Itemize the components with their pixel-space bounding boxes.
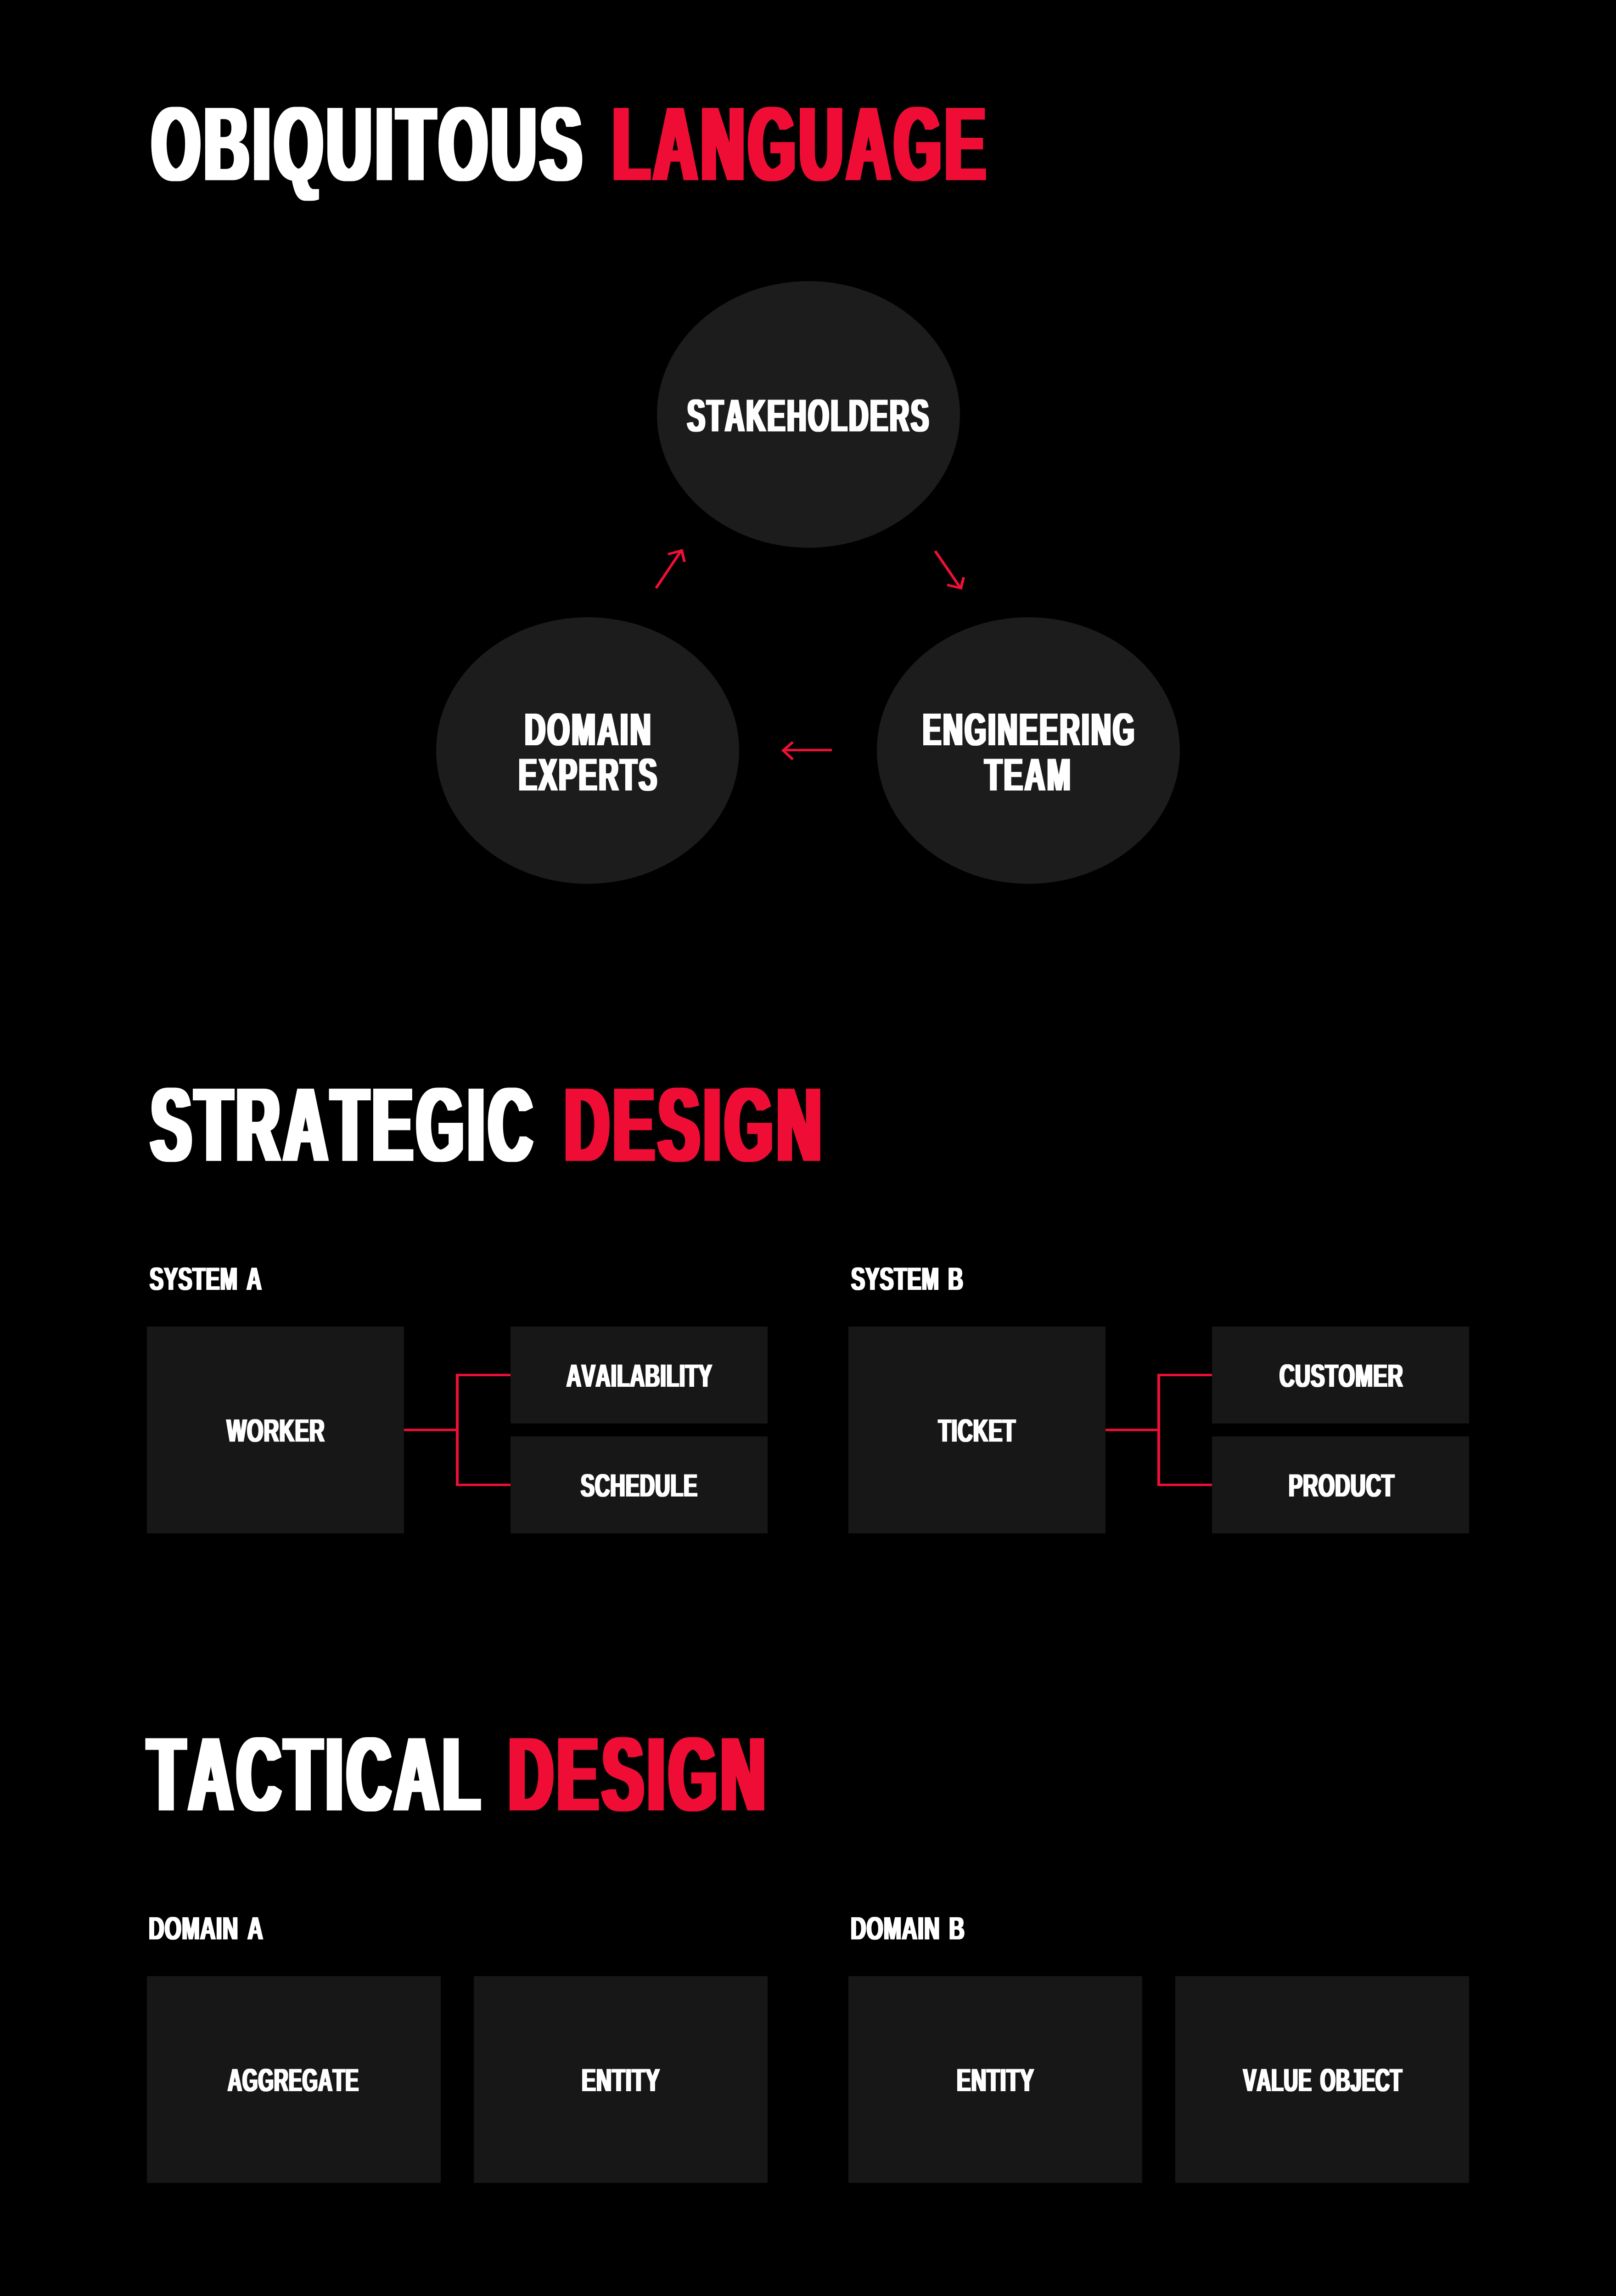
box: aggregate <box>147 1976 441 2183</box>
box: product: PRODUCT <box>1289 1468 1395 1503</box>
title: ubiquitous language: OBIQUITOUS <box>152 85 586 203</box>
box: customer: CUSTOMER <box>1279 1358 1403 1394</box>
heading: strategic design: DESIGN <box>565 1066 825 1183</box>
box: aggregate: AGGREGATE <box>228 2062 359 2098</box>
heading: tactical design: TACTICAL <box>148 1716 484 1833</box>
panel: system a <box>147 1261 768 1533</box>
box: entity: ENTITY <box>582 2062 660 2098</box>
box: schedule: SCHEDULE <box>581 1468 698 1503</box>
label: system b: SYSTEM B <box>851 1261 964 1297</box>
box: worker: WORKER <box>227 1412 325 1448</box>
label: domain a: DOMAIN A <box>149 1910 264 1946</box>
node: engineering team: TEAM <box>985 749 1072 800</box>
node: engineering team <box>877 617 1180 884</box>
heading: strategic design: STRATEGIC <box>151 1066 536 1183</box>
panel: domain b <box>848 1910 1469 2183</box>
label: domain b: DOMAIN B <box>851 1910 965 1946</box>
node: domain experts <box>436 617 739 884</box>
node: stakeholders <box>657 281 960 548</box>
arrow: domain experts to stakeholders <box>656 550 685 588</box>
box: schedule <box>511 1436 768 1533</box>
box: product <box>1212 1436 1469 1533</box>
node: stakeholders: STAKEHOLDERS <box>687 390 931 441</box>
arrow: engineering team to domain experts <box>783 742 832 760</box>
connector: worker to children <box>404 1375 511 1485</box>
box: entity <box>474 1976 768 2183</box>
heading: tactical design: DESIGN <box>509 1716 769 1833</box>
node: domain experts: EXPERTS <box>519 749 659 800</box>
box: entity <box>848 1976 1142 2183</box>
arrow: stakeholders to engineering team <box>935 551 964 589</box>
label: system a: SYSTEM A <box>150 1261 262 1297</box>
panel: domain a <box>147 1910 768 2183</box>
box: availability <box>511 1327 768 1424</box>
connector: ticket to children <box>1105 1375 1212 1485</box>
box: availability: AVAILABILITY <box>567 1358 713 1394</box>
box: value object <box>1175 1976 1469 2183</box>
box: worker <box>147 1327 404 1533</box>
node: domain experts: DOMAIN <box>525 704 653 755</box>
box: ticket <box>848 1327 1105 1533</box>
box: value object: VALUE OBJECT <box>1243 2062 1403 2098</box>
box: ticket: TICKET <box>938 1412 1016 1448</box>
box: customer <box>1212 1327 1469 1424</box>
node: engineering team: ENGINEERING <box>923 704 1136 755</box>
panel: system b <box>848 1261 1469 1533</box>
title: ubiquitous language: LANGUAGE <box>613 85 989 203</box>
box: entity: ENTITY <box>957 2062 1034 2098</box>
panel: collaboration cycle <box>436 281 1180 884</box>
